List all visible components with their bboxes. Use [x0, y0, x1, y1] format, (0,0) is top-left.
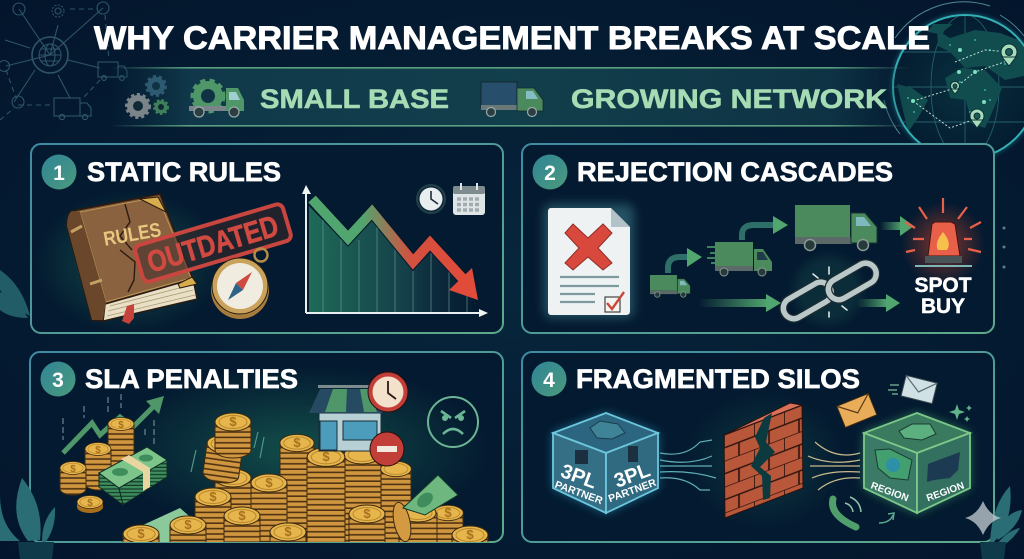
- banner: small base to growing network: [110, 67, 910, 127]
- large coin piles: $: [184, 517, 192, 532]
- icon: light envelope: [888, 375, 937, 404]
- icon: sparkles: [949, 404, 972, 422]
- silo cube: 3PL partner: [553, 413, 658, 513]
- label: small base: SMALL BASE: [260, 84, 449, 114]
- large coin piles: $: [238, 508, 246, 523]
- large coin piles: $: [322, 449, 330, 464]
- icon: rejected document: [544, 204, 634, 318]
- arrow: lower left: [698, 294, 781, 312]
- icon: angry face: [428, 397, 478, 447]
- heading: fragmented silos: FRAGMENTED SILOS: [576, 364, 860, 394]
- small coin stacks and cash: $: [95, 445, 101, 456]
- plant bottom left: [0, 478, 55, 559]
- icon: clock: [417, 185, 445, 213]
- plant bottom right: [980, 486, 1022, 559]
- large coin piles: $: [137, 526, 145, 541]
- large coin piles: $: [466, 527, 474, 542]
- number badge 3: 3: [52, 369, 64, 392]
- arrow: lower right: [857, 294, 900, 312]
- label: spot buy: BUY: [921, 295, 965, 318]
- small coin stacks and cash: [60, 418, 167, 513]
- silo cube: region: [864, 413, 970, 513]
- frayed wires left: [660, 440, 716, 490]
- plant left: [0, 270, 30, 318]
- icon: alarm clock: [368, 372, 408, 412]
- labels: 3PL partner: 3PL: [611, 459, 653, 493]
- large coin piles: $: [363, 506, 371, 521]
- large coin piles: $: [229, 414, 237, 429]
- icon: gears: [127, 77, 168, 117]
- large coin piles: $: [293, 435, 301, 450]
- icon: small truck: [650, 275, 690, 297]
- small coin stacks and cash: $: [118, 420, 124, 431]
- heading: static rules: STATIC RULES: [87, 157, 281, 187]
- title: WHY CARRIER MANAGEMENT BREAKS AT SCALE: [94, 20, 930, 56]
- panel 4: fragmented silos: [522, 352, 994, 542]
- globe top right: [884, 2, 1024, 161]
- icon: orange envelope: [837, 394, 877, 428]
- panel 2: rejection cascades: [522, 144, 994, 333]
- label: spot buy: [914, 274, 972, 318]
- labels: 3PL partner: PARTNER: [553, 479, 605, 507]
- stamp: outdated: OUTDATED: [144, 210, 282, 280]
- labels: region: REGION: [925, 480, 966, 504]
- large coin piles: $: [209, 489, 217, 504]
- icon: calendar: [453, 183, 485, 215]
- small coin stacks and cash: $: [87, 498, 93, 509]
- frayed wires right: [808, 442, 860, 490]
- number badge 2: 2: [544, 162, 556, 185]
- large coin piles: $: [265, 475, 273, 490]
- number badge 1: [42, 154, 76, 190]
- icon: phone: [832, 497, 894, 527]
- labels: region: REGION: [869, 480, 910, 504]
- sparkle watermark: [965, 501, 1001, 535]
- large coin piles: [123, 413, 488, 553]
- labels: 3PL partner: [553, 459, 658, 507]
- book label: RULES: [102, 219, 163, 251]
- icon: minus badge: [370, 432, 404, 466]
- icon: storefront: [309, 385, 383, 451]
- arrow: curved small: [668, 248, 702, 273]
- number badge 1: 1: [53, 162, 65, 185]
- panel 3: SLA penalties: [30, 352, 503, 553]
- heading: SLA penalties: SLA PENALTIES: [85, 364, 298, 394]
- labels: 3PL partner: 3PL: [558, 460, 600, 494]
- icon: siren: [901, 198, 985, 286]
- icon: broken chain: [779, 256, 880, 324]
- dots right: [1002, 226, 1006, 268]
- icon: medium truck: [707, 242, 772, 276]
- number badge 4: [532, 362, 566, 396]
- icon: large truck: [795, 205, 877, 250]
- icon: blue truck: [481, 82, 543, 116]
- icon: cracked rules book: [67, 194, 197, 324]
- heading: rejection cascades: REJECTION CASCADES: [577, 157, 893, 187]
- number badge 4: 4: [543, 369, 555, 392]
- small coin stacks and cash: $: [70, 464, 76, 475]
- label: growing network: GROWING NETWORK: [571, 84, 888, 114]
- label: spot buy: SPOT: [914, 274, 972, 297]
- labels: region: [869, 480, 966, 504]
- cracked brick wall: [724, 403, 803, 518]
- labels: 3PL partner: PARTNER: [607, 477, 658, 505]
- number badge 2: [532, 154, 568, 190]
- icon: compass: [211, 248, 269, 319]
- arrow: rising trend: [63, 394, 164, 453]
- large coin piles: $: [284, 524, 292, 539]
- chart: falling trend: [302, 185, 488, 317]
- panel 1: static rules: [31, 144, 503, 334]
- arrow: curved medium: [742, 216, 788, 240]
- network diagram top left: [0, 2, 127, 120]
- number badge 3: [40, 362, 76, 396]
- large coin piles: $: [444, 505, 452, 520]
- arrow: to siren: [880, 216, 914, 236]
- icon: truck with gear: [189, 81, 244, 117]
